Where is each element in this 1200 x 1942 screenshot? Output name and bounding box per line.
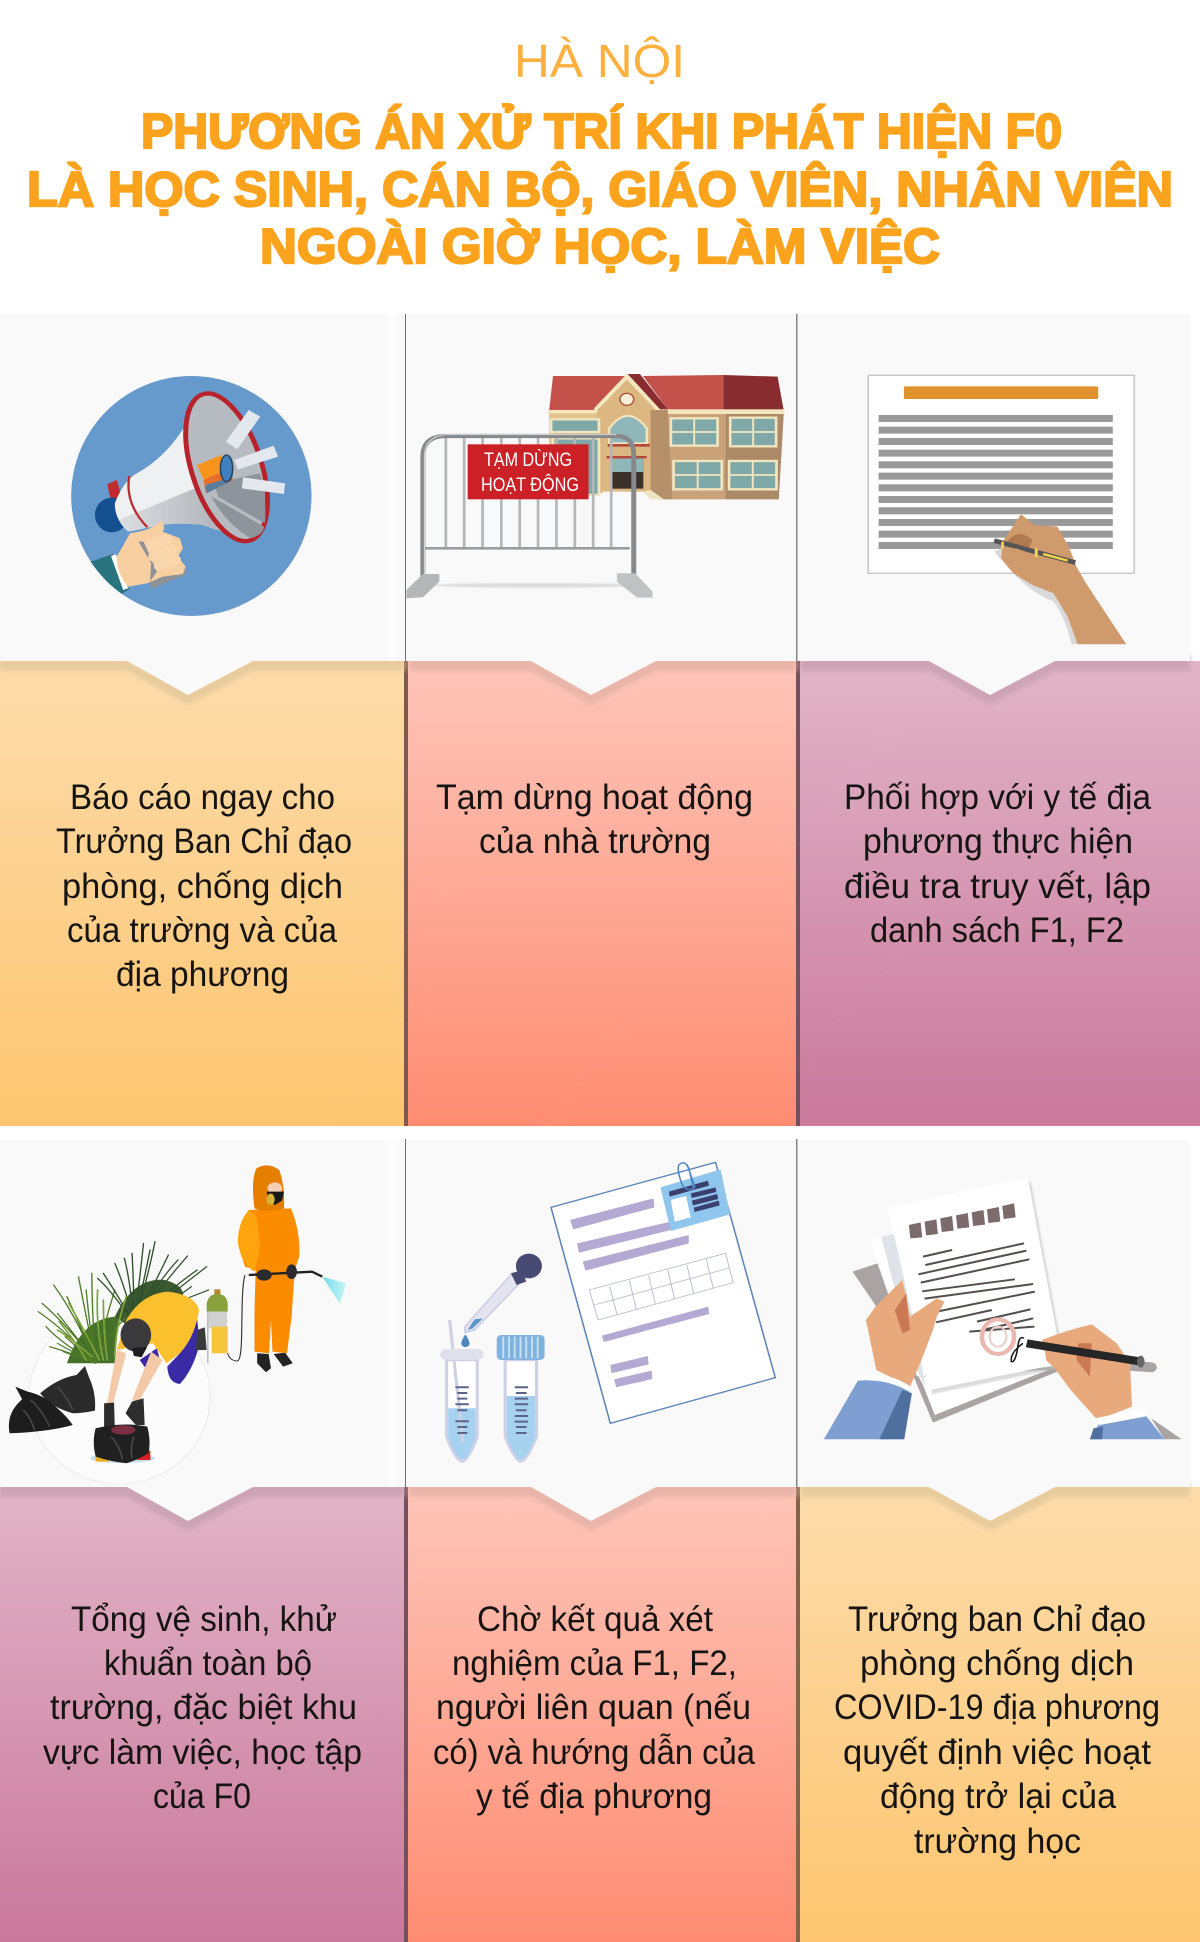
text: step 3 xyxy=(844,778,1152,950)
icon: document and writing hand xyxy=(868,375,1134,644)
icon: school building behind barrier xyxy=(406,374,785,598)
text: step 5: có) và hướng dẫn của xyxy=(433,1733,755,1772)
text: step 4: khuẩn toàn bộ xyxy=(104,1644,312,1683)
text: step 5 xyxy=(433,1600,755,1816)
text: step 1 xyxy=(56,778,352,994)
crouching worker xyxy=(104,1292,207,1428)
text: step 3: Phối hợp với y tế địa xyxy=(844,778,1152,817)
text: step 3: điều tra truy vết, lập xyxy=(844,867,1151,906)
row 2 colour bands xyxy=(0,1487,1200,1942)
text: step 4: trường, đặc biệt khu xyxy=(50,1688,357,1727)
sign text: HOẠT ĐỘNG xyxy=(481,474,579,496)
watermarks: TTXVN – VNA xyxy=(521,1002,649,1154)
row 1 panel shadow xyxy=(0,655,1190,705)
text: step 1: của trường và của xyxy=(67,911,337,950)
trash bags xyxy=(9,1366,155,1463)
sprayer tank xyxy=(207,1289,228,1363)
right hand and pen xyxy=(1075,1362,1151,1367)
text: step 6: Trưởng ban Chỉ đạo xyxy=(848,1600,1146,1639)
text: step 4: của F0 xyxy=(153,1777,251,1816)
text: step 1: Trưởng Ban Chỉ đạo xyxy=(56,822,352,861)
watermarks: TTXVN – VNA xyxy=(342,858,478,1004)
title: main heading: LÀ HỌC SINH, CÁN BỘ, GIÁO VIÊN, NHÂN VIÊN xyxy=(27,162,1173,217)
icon: disinfection workers and trash bags xyxy=(9,1165,346,1484)
text: step 6: COVID-19 địa phương xyxy=(834,1688,1160,1727)
building xyxy=(548,374,785,499)
text: step 4: vực làm việc, học tập xyxy=(43,1733,362,1772)
plants xyxy=(38,1242,209,1363)
watermarks: INFOGRAPHICS xyxy=(301,978,447,1154)
text: step 5: y tế địa phương xyxy=(476,1777,712,1816)
sign text: TẠM DỪNG xyxy=(484,449,572,471)
text: step 6: phòng chống dịch xyxy=(860,1644,1134,1683)
text: step 2 xyxy=(436,778,753,861)
title: location: HÀ NỘI xyxy=(514,35,685,87)
test tube right xyxy=(497,1335,545,1462)
text: step 6: trường học xyxy=(914,1822,1081,1861)
title: main heading xyxy=(27,104,1173,274)
text: step 6: động trở lại của xyxy=(880,1777,1117,1816)
row 1 colour bands xyxy=(0,661,1200,1126)
icon: pipette and test tubes xyxy=(440,1254,545,1462)
watermarks xyxy=(301,696,928,1154)
text: step 2: Tạm dừng hoạt động xyxy=(436,778,753,817)
text: step 5: nghiệm của F1, F2, xyxy=(452,1644,737,1683)
text: step 6 xyxy=(834,1600,1160,1861)
text: step 1: địa phương xyxy=(116,955,289,994)
title: main heading: NGOÀI GIỜ HỌC, LÀM VIỆC xyxy=(260,219,940,274)
row 2 image panel xyxy=(0,1140,1190,1521)
title: main heading: PHƯƠNG ÁN XỬ TRÍ KHI PHÁT HIỆN F0 xyxy=(141,104,1062,159)
text: step 1: phòng, chống dịch xyxy=(62,867,343,906)
text: step 4 xyxy=(43,1600,362,1816)
icon: signing document with two hands xyxy=(824,1178,1182,1439)
text: step 5: người liên quan (nếu xyxy=(436,1688,751,1727)
row 2 panel shadow xyxy=(0,1481,1190,1531)
text: step 3: phương thực hiện xyxy=(863,822,1133,861)
watermarks: INFOGRAPHICS xyxy=(761,938,907,1114)
icon: megaphone held in hand xyxy=(71,376,312,616)
watermarks: INFOGRAPHICS xyxy=(772,696,928,864)
test tube left xyxy=(440,1320,483,1462)
worker in orange suit xyxy=(228,1165,346,1372)
row 1 image panel xyxy=(0,314,1190,695)
text: step 1: Báo cáo ngay cho xyxy=(70,778,335,817)
text: step 6: quyết định việc hoạt xyxy=(843,1733,1151,1772)
left hand xyxy=(866,1280,944,1387)
sign text xyxy=(481,449,579,496)
text: step 5: Chờ kết quả xét xyxy=(477,1600,713,1639)
text: step 3: danh sách F1, F2 xyxy=(870,911,1124,950)
icon: test result form xyxy=(551,1162,775,1423)
barrier xyxy=(423,435,634,582)
text: step 4: Tổng vệ sinh, khử xyxy=(71,1600,337,1639)
text: step 2: của nhà trường xyxy=(479,822,711,861)
